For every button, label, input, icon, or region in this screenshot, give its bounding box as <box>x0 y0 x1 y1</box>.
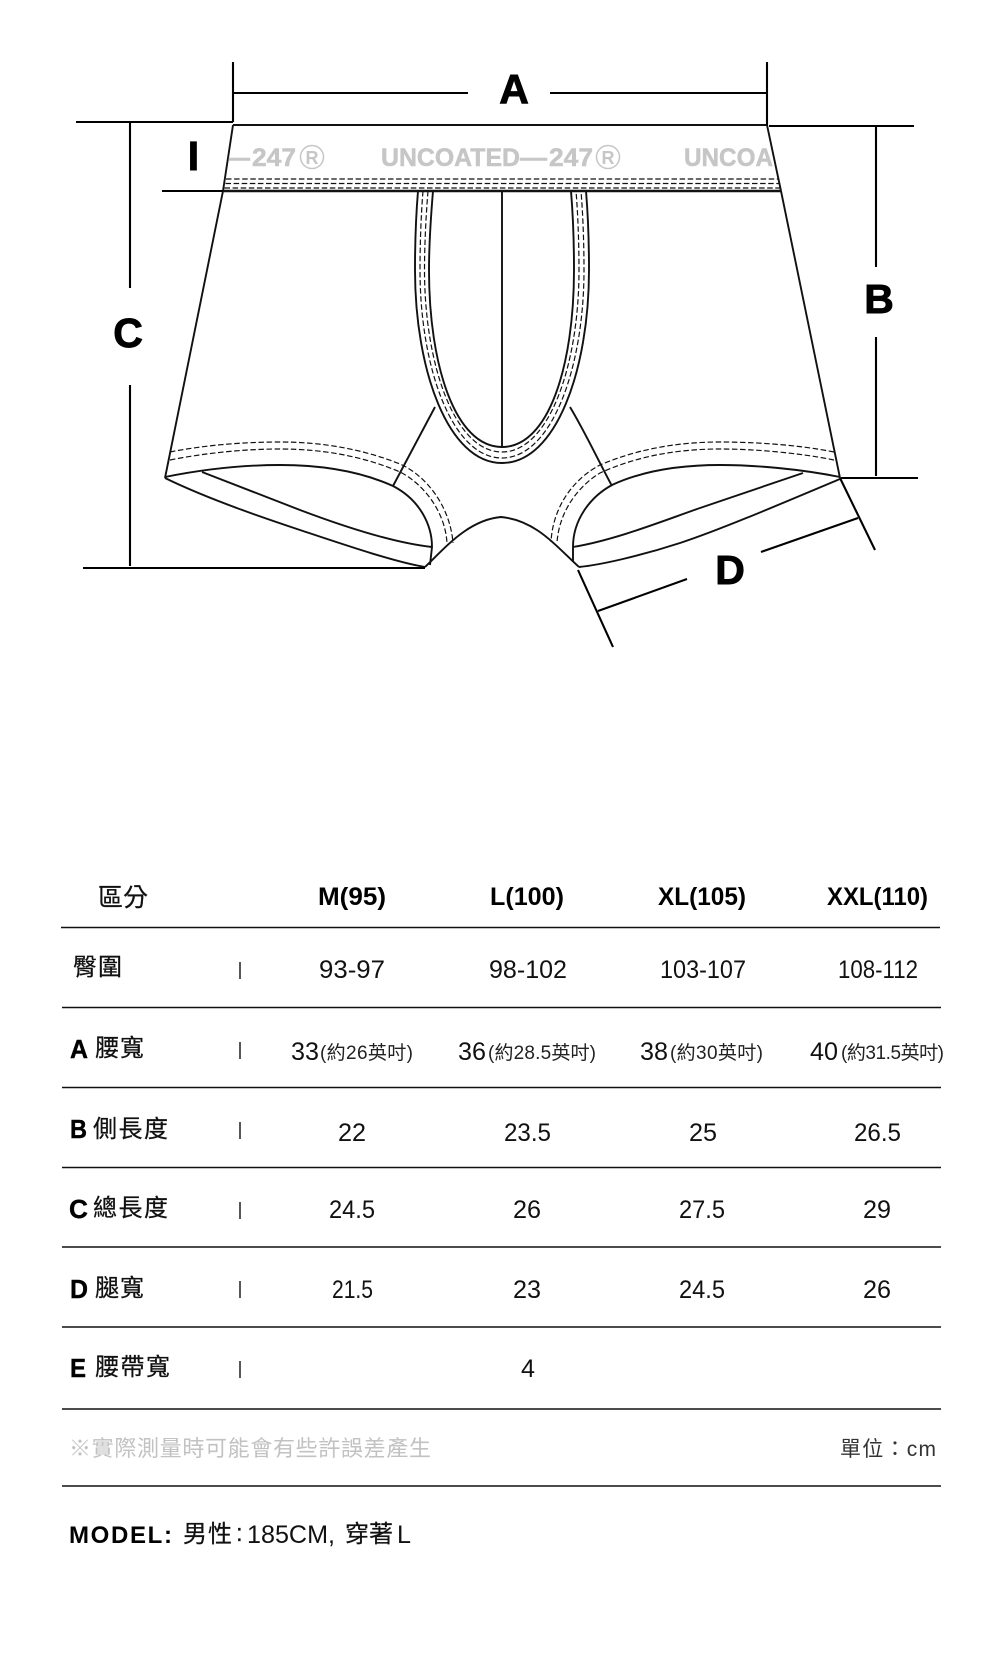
row: hip: 臀圍 <box>73 954 122 981</box>
row: A waist: 36 <box>458 1038 486 1066</box>
row: B side length: 23.5 <box>504 1119 551 1147</box>
row: C total length: 26 <box>513 1196 541 1224</box>
row: D leg width: D <box>70 1274 88 1304</box>
row: A waist: (約26英吋) <box>320 1042 413 1064</box>
row: D leg width: 23 <box>513 1276 541 1304</box>
row: A waist: (約28.5英吋) <box>488 1042 596 1064</box>
row: A waist: (約30英吋) <box>670 1042 763 1064</box>
row: hip: 98-102 <box>489 956 567 984</box>
footnote: measurement disclaimer: ※實際測量時可能會有些許誤差產生 <box>69 1436 431 1461</box>
waistband text: 247 <box>252 144 296 172</box>
waistband text: UNCOA <box>684 144 773 172</box>
row: C total length <box>69 1194 891 1224</box>
dimension D: D <box>715 547 745 593</box>
row: D leg width <box>70 1274 891 1304</box>
table header row: L(100) <box>490 883 564 911</box>
right leg opening <box>551 442 840 567</box>
table header row <box>98 883 928 912</box>
row: C total length: 27.5 <box>679 1196 725 1224</box>
row: A waist: (約31.5英吋) <box>841 1042 944 1064</box>
row: B side length: 25 <box>689 1119 717 1147</box>
row: A waist: 腰寬 <box>95 1035 144 1062</box>
row: B side length: 26.5 <box>854 1119 901 1147</box>
row: B side length: 側長度 <box>93 1116 168 1143</box>
table header row: XXL(110) <box>827 883 928 911</box>
model info: 男性 <box>183 1521 232 1548</box>
unit note: 單位：cm <box>840 1438 936 1461</box>
model info: MODEL: <box>69 1522 172 1549</box>
waistband stitching <box>224 179 780 188</box>
table header row: 區分 <box>98 884 148 912</box>
left leg opening <box>165 442 453 567</box>
dimension I: I <box>188 133 199 179</box>
diagram: boxer briefs with measurements <box>76 62 918 647</box>
size table <box>61 883 944 1549</box>
row: C total length: 24.5 <box>329 1196 375 1224</box>
row: A waist: 38 <box>640 1038 668 1066</box>
waistband text: — <box>229 144 250 172</box>
row: C total length: C <box>69 1194 88 1224</box>
row: E waistband width: E <box>70 1353 86 1383</box>
row: B side length: 22 <box>338 1119 366 1147</box>
row: D leg width: 21.5 <box>332 1276 373 1304</box>
table header row: M(95) <box>318 883 386 911</box>
dimension I <box>162 133 223 191</box>
row: hip: 108-112 <box>838 956 918 984</box>
row: hip: 93-97 <box>319 956 385 984</box>
table header row: XL(105) <box>658 883 746 911</box>
row: C total length: 29 <box>863 1196 891 1224</box>
row: A waist: 40 <box>810 1038 838 1066</box>
dimension B <box>769 125 918 478</box>
row: D leg width: 24.5 <box>679 1276 725 1304</box>
waistband text <box>229 144 773 172</box>
dimension C <box>76 122 425 568</box>
row: D leg width: 腿寬 <box>95 1275 144 1302</box>
waistband text: R <box>602 148 614 168</box>
row: B side length: B <box>70 1114 87 1144</box>
dimension B: B <box>864 276 894 322</box>
row: A waist <box>70 1034 944 1066</box>
row: E waistband width: 腰帶寬 <box>95 1354 170 1381</box>
dimension A <box>233 62 767 125</box>
row: hip: 103-107 <box>660 956 746 984</box>
garment outline <box>165 125 840 567</box>
waistband text: 247 <box>549 144 593 172</box>
model info: 穿著 <box>345 1521 393 1548</box>
row: B side length <box>70 1114 901 1147</box>
model info: : <box>236 1520 243 1547</box>
dimension A: A <box>499 66 529 112</box>
waistband text: R <box>306 148 318 168</box>
row: E waistband width: 4 <box>521 1355 535 1383</box>
row: D leg width: 26 <box>863 1276 891 1304</box>
dimension D <box>578 478 875 647</box>
table rules <box>61 928 941 1486</box>
waistband text: UNCOATED <box>381 144 520 172</box>
model info: 185CM, <box>247 1521 335 1549</box>
waistband text: — <box>520 144 547 172</box>
row: hip <box>73 954 918 984</box>
row: C total length: 總長度 <box>93 1195 168 1222</box>
row: A waist: A <box>70 1034 88 1064</box>
model info <box>69 1520 411 1549</box>
row: E waistband width <box>70 1353 535 1383</box>
front pouch <box>415 191 589 463</box>
row: A waist: 33 <box>291 1038 319 1066</box>
dimension C: C <box>113 310 143 356</box>
model info: L <box>397 1521 411 1549</box>
